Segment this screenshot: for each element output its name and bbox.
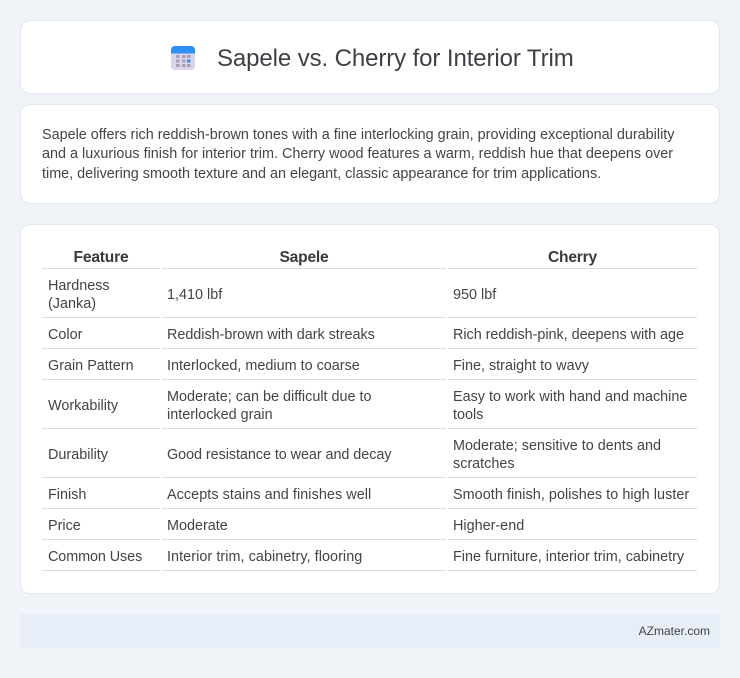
comparison table — [42, 249, 697, 571]
title panel — [20, 20, 720, 94]
comparison table: tools — [453, 407, 483, 423]
comparison table: Common Uses — [48, 549, 142, 565]
comparison table: (Janka) — [48, 296, 96, 312]
intro text: time, delivering smooth texture and an elegant, classic appearance for trim applications. — [42, 166, 601, 182]
comparison table: Moderate — [167, 518, 228, 534]
footer credit: AZmater.com — [639, 624, 710, 638]
comparison table: Color — [48, 327, 82, 343]
comparison table: Good resistance to wear and decay — [167, 447, 391, 463]
comparison table: Accepts stains and finishes well — [167, 487, 371, 503]
comparison table: Durability — [48, 447, 108, 463]
comparison table: Rich reddish-pink, deepens with age — [453, 327, 684, 343]
header row: Feature — [74, 249, 128, 266]
comparison table: Easy to work with hand and machine — [453, 389, 687, 405]
header row: Sapele — [279, 249, 329, 266]
title: Sapele vs. Cherry for Interior Trim — [217, 45, 574, 72]
table panel — [20, 224, 720, 594]
comparison table: Finish — [48, 487, 86, 503]
header row: Cherry — [548, 249, 597, 266]
footer bar — [20, 614, 720, 648]
comparison table: Fine, straight to wavy — [453, 358, 589, 374]
comparison table: Interior trim, cabinetry, flooring — [167, 549, 362, 565]
comparison table: Fine furniture, interior trim, cabinetry — [453, 549, 684, 565]
comparison table: Smooth finish, polishes to high luster — [453, 487, 689, 503]
comparison table: Hardness — [48, 278, 110, 294]
comparison table: interlocked grain — [167, 407, 273, 423]
comparison table: Interlocked, medium to coarse — [167, 358, 360, 374]
comparison table: Workability — [48, 398, 118, 414]
comparison table: Price — [48, 518, 81, 534]
intro panel — [20, 104, 720, 204]
comparison table: 1,410 lbf — [167, 287, 222, 303]
comparison table: Moderate; sensitive to dents and — [453, 438, 661, 454]
intro text: Sapele offers rich reddish-brown tones with a fine interlocking grain, providing exceptional durability — [42, 126, 674, 142]
icon: calendar — [171, 46, 195, 70]
comparison table: Moderate; can be difficult due to — [167, 389, 372, 405]
comparison table: Reddish-brown with dark streaks — [167, 327, 375, 343]
intro text — [42, 126, 674, 182]
comparison table: Grain Pattern — [48, 358, 134, 374]
comparison table: Higher-end — [453, 518, 524, 534]
intro text: and a luxurious finish for interior trim. Cherry wood features a warm, reddish hue that deepens over — [42, 146, 673, 162]
comparison table: 950 lbf — [453, 287, 496, 303]
header row — [42, 249, 697, 269]
comparison table: scratches — [453, 456, 515, 472]
